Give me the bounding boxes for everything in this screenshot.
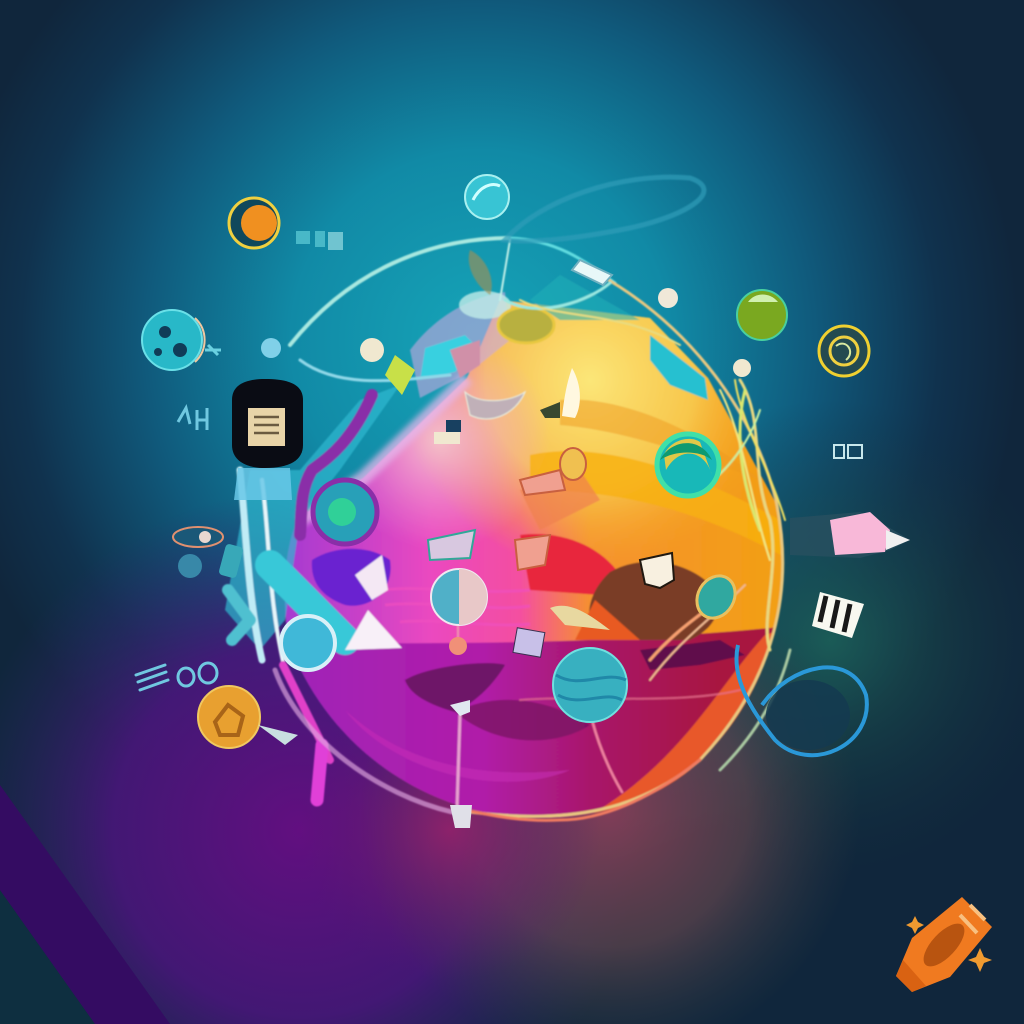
icon: teal bubble top xyxy=(465,175,509,219)
label: small glyph block left xyxy=(178,408,207,430)
icon: large teal bubble bottom xyxy=(553,648,627,722)
icon: pencil right xyxy=(790,512,910,558)
icon: gold coin lower left xyxy=(198,686,298,748)
orange crescent xyxy=(594,632,772,813)
maroon dark shape xyxy=(405,663,505,712)
icon: small white cap centre xyxy=(640,553,674,588)
icon: small orange-teal bubble xyxy=(689,569,743,625)
icon: piano keys xyxy=(812,592,864,638)
floating icon: swoosh xyxy=(505,177,704,241)
label: left glyph strokes xyxy=(136,663,217,690)
icon: yellow swirl ball xyxy=(819,326,869,376)
icon: green ball xyxy=(737,290,787,340)
icon: small nodes on globe xyxy=(261,288,751,828)
icon: sparkle small xyxy=(906,916,924,934)
icon: teal swirl in left globe xyxy=(313,480,377,544)
logo: crayon xyxy=(896,897,992,992)
icon: device xyxy=(232,379,303,500)
brown block xyxy=(589,562,717,640)
globe body xyxy=(284,300,782,818)
icon: teal ring left xyxy=(281,616,335,670)
lower magenta and crimson zone xyxy=(302,627,774,818)
magenta stripes xyxy=(385,589,530,625)
globe outer ring xyxy=(290,238,790,820)
purple blob with white shards xyxy=(312,549,402,650)
icon: left small eye cluster xyxy=(173,527,244,579)
globe xyxy=(221,235,792,823)
orange sweeps xyxy=(530,451,790,560)
icon: sparkle large xyxy=(968,948,992,972)
icon: teal globe left xyxy=(142,310,221,370)
icon: white flame xyxy=(540,368,580,418)
red block xyxy=(520,534,620,595)
icon: orange coin top left xyxy=(229,198,279,248)
label: small glyph block right xyxy=(834,445,862,458)
pale edge of globe body xyxy=(300,378,467,520)
glass cells top xyxy=(410,250,708,419)
icon: blue loop xyxy=(736,645,867,755)
left ribbons xyxy=(225,385,452,812)
icon: centre pie bubble xyxy=(431,569,487,655)
label: small glyph block xyxy=(296,231,343,250)
icon: green ring right xyxy=(657,434,719,496)
icon: small centre box xyxy=(428,420,475,560)
icon: hand shapes xyxy=(515,260,612,570)
